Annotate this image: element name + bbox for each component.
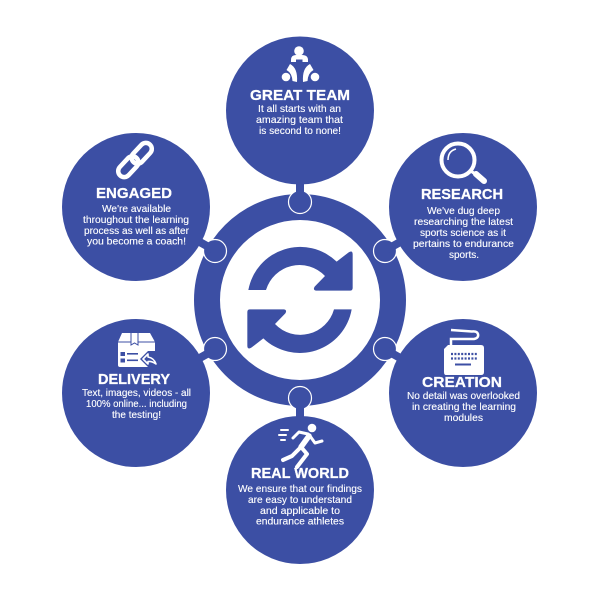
connectors between ring and panels: [198, 180, 402, 420]
icon: team: [282, 46, 319, 82]
text: real world: endurance athletes: [256, 516, 344, 528]
text: delivery: 100% online... including: [86, 399, 187, 410]
icon: parcel box: [118, 333, 160, 369]
icon: runner: [279, 424, 322, 467]
heading: research: RESEARCH: [421, 186, 503, 203]
text: great team: It all starts with an: [258, 104, 341, 115]
text: creation: modules: [444, 413, 483, 424]
panel: real world: [226, 416, 374, 564]
text: real world: We ensure that our findings: [238, 484, 362, 495]
text: great team: [256, 104, 343, 137]
text: great team: amazing team that: [256, 115, 343, 126]
text: engaged: We're available: [102, 204, 171, 215]
text: research: sports science as it: [420, 228, 506, 239]
heading: engaged: ENGAGED: [96, 185, 172, 202]
panel: creation: [389, 319, 537, 467]
text: creation: [407, 391, 520, 424]
central ring: [207, 207, 393, 393]
text: delivery: [82, 388, 191, 421]
text: delivery: Text, images, videos - all: [82, 388, 191, 399]
text: engaged: throughout the learning: [83, 215, 189, 226]
text: engaged: process as well as after: [84, 226, 190, 237]
heading: real world: REAL WORLD: [251, 465, 349, 482]
text: real world: are easy to understand: [248, 495, 352, 506]
text: real world: and applicable to: [260, 506, 340, 517]
text: research: researching the latest: [414, 217, 513, 228]
text: engaged: [83, 204, 190, 248]
panel: great team: [226, 36, 374, 184]
icon: sync arrows: [247, 247, 353, 353]
text: engaged: you become a coach!: [87, 236, 186, 248]
text: delivery: the testing!: [112, 410, 161, 421]
text: real world: [238, 484, 362, 528]
icon: chain link: [116, 140, 154, 180]
text: creation: No detail was overlooked: [407, 391, 520, 402]
panel: research: [389, 133, 537, 281]
text: research: We've dug deep: [427, 206, 500, 217]
text: research: pertains to endurance: [413, 239, 514, 250]
icon: keyboard: [444, 330, 484, 375]
heading: delivery: DELIVERY: [98, 371, 170, 388]
text: research: [413, 206, 514, 261]
text: creation: in creating the learning: [412, 402, 516, 413]
heading: creation: CREATION: [422, 374, 502, 391]
icon: magnifying glass: [442, 144, 484, 181]
text: great team: is second to none!: [259, 126, 341, 137]
panel: engaged: [62, 133, 210, 281]
heading: great team: GREAT TEAM: [250, 87, 350, 104]
text: research: sports.: [449, 250, 479, 261]
panel: delivery: [62, 319, 210, 467]
